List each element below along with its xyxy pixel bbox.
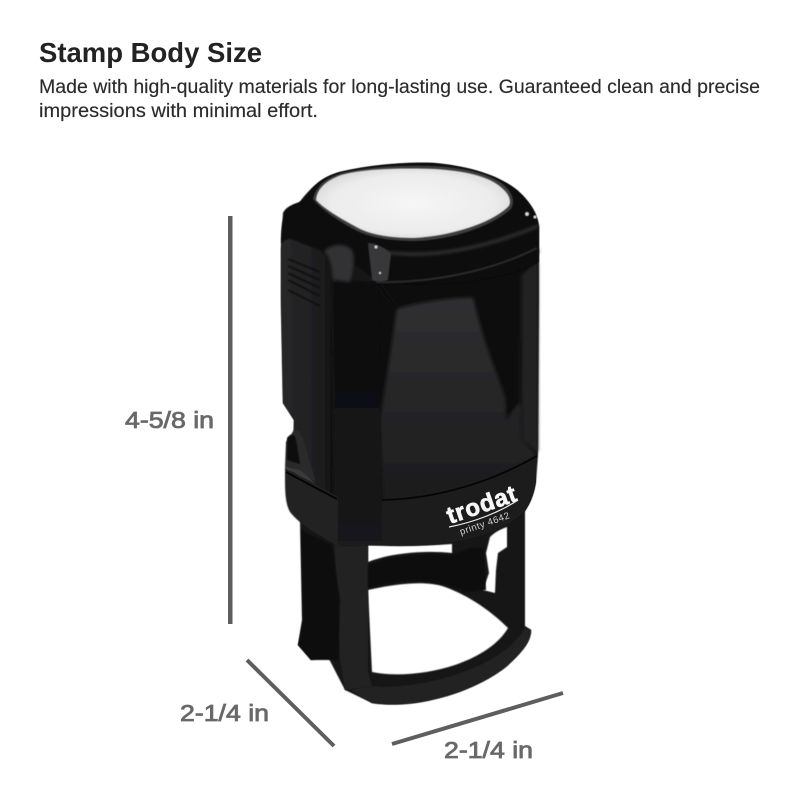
description text: Made with high-quality materials for long-lasting use. Guaranteed clean and precise [39,76,760,98]
inner back ring [368,548,486,592]
stamp body silhouette [281,163,539,546]
front reflective panel [380,298,536,500]
description text: impressions with minimal effort. [39,100,318,122]
dimension: height line [228,216,232,624]
front pillar [334,535,372,690]
latch edge [286,472,337,499]
lower band shading [380,455,536,546]
latch [285,430,316,482]
stamp product illustration [281,163,540,704]
left mechanism [298,530,340,660]
white cap rim [313,166,513,241]
latch top face [285,467,316,484]
left black streak [376,282,397,500]
clear plastic corner [368,243,391,282]
vertical pillar band [333,280,382,545]
base ring highlight [347,627,531,704]
body seam [382,456,537,500]
latch lever [285,467,338,546]
upper black area [378,250,540,420]
top collar [298,163,539,284]
sparkle highlights [374,212,537,274]
collar gloss [372,226,538,254]
white cap [316,169,510,238]
logo underline [449,500,518,527]
right reflection strip [522,262,538,452]
description text [39,76,760,122]
clip grip lines [288,259,320,306]
dimension: depth label: 2-1/4 in [180,700,269,726]
dimension: depth line [247,660,334,746]
dimension: height label: 4-5/8 in [125,407,214,433]
dimension: width label: 2-1/4 in [444,737,533,763]
model name: printy 4642 [458,511,511,538]
shoulder gloss [324,245,354,282]
latch opening [287,435,300,464]
side clip panel [281,239,333,497]
dimension: width line [392,693,563,744]
title: Stamp Body Size [39,37,262,68]
brand logo [443,481,520,538]
left shoulder [281,201,361,256]
stamp legs and base ring [298,505,531,704]
logo wordmark: trodat [443,481,520,530]
